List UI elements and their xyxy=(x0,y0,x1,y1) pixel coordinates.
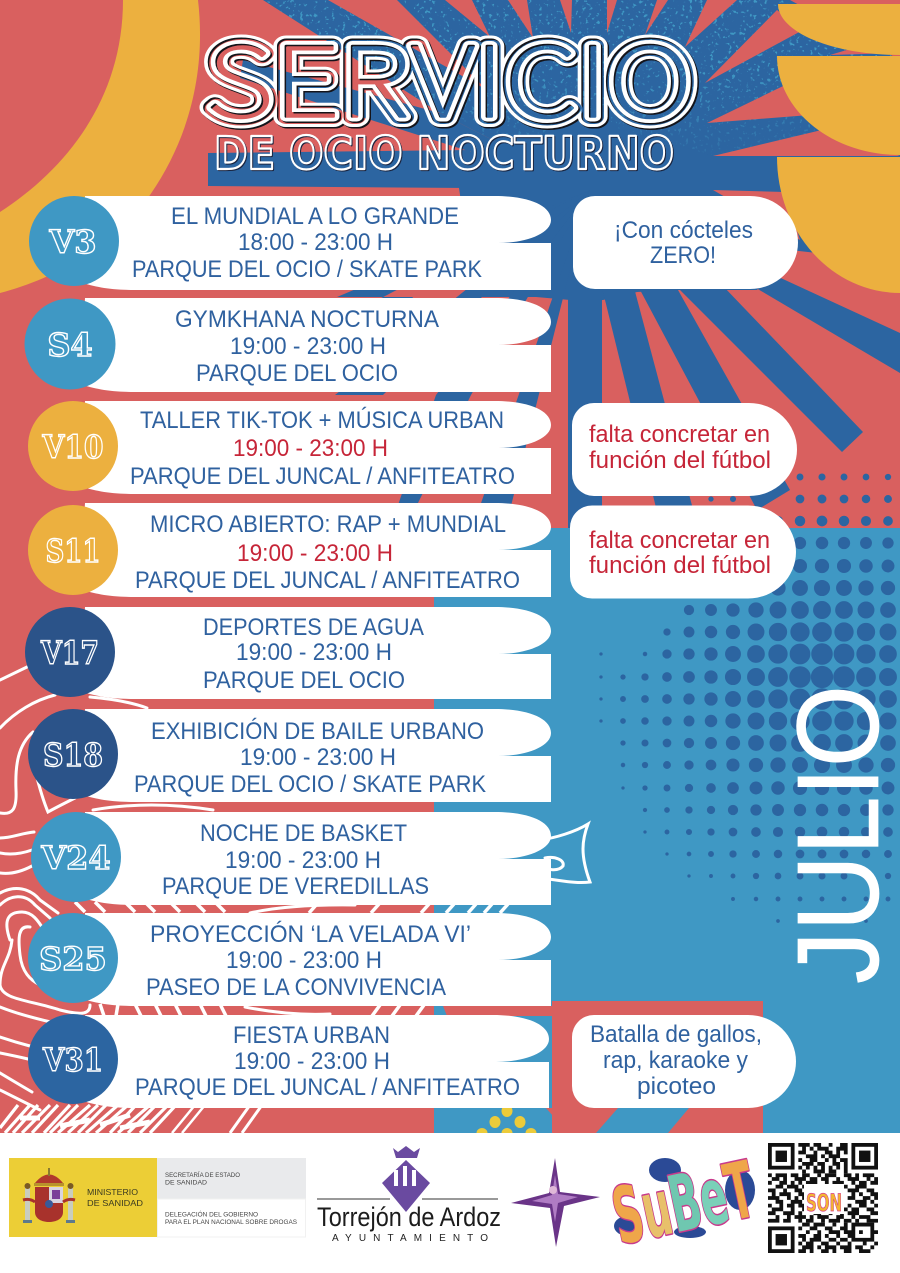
callout: falta concretar S11: falta concretar en xyxy=(589,527,770,554)
row: S11: 19:00 - 23:00 H xyxy=(237,540,393,567)
callout: batalla de gallos xyxy=(572,1015,796,1108)
row: S25 xyxy=(28,913,551,1006)
white scratches xyxy=(0,1105,262,1133)
title xyxy=(200,34,699,130)
row: V10: V10 xyxy=(42,428,104,466)
row: V24: NOCHE DE BASKET xyxy=(200,820,407,847)
row: V24: PARQUE DE VEREDILLAS xyxy=(162,873,429,900)
light blue panels xyxy=(434,528,900,1133)
row: S18: 19:00 - 23:00 H xyxy=(240,744,396,771)
row: S4: PARQUE DEL OCIO xyxy=(196,360,398,387)
halftone dots xyxy=(600,474,896,922)
callout: batalla de gallos: rap, karaoke y xyxy=(603,1047,748,1074)
logo: Ministerio de Sanidad: DE SANIDAD xyxy=(87,1198,143,1208)
row: S11: PARQUE DEL JUNCAL / ANFITEATRO xyxy=(135,567,520,594)
logo: Ministerio de Sanidad: PARA EL PLAN NACIONAL SOBRE DROGAS xyxy=(165,1219,297,1226)
row: V31 xyxy=(28,1014,549,1108)
yellow dots xyxy=(476,1108,536,1133)
callout: batalla de gallos: picoteo xyxy=(637,1073,716,1100)
footer background xyxy=(0,1133,900,1273)
row: V31: FIESTA URBAN xyxy=(233,1022,390,1049)
row: V17: V17 xyxy=(40,634,99,672)
row: V3: V3 xyxy=(48,223,97,261)
row: V17: DEPORTES DE AGUA xyxy=(203,614,424,641)
row: S11 xyxy=(28,503,551,597)
row: S4: S4 xyxy=(47,326,93,364)
row: V10: PARQUE DEL JUNCAL / ANFITEATRO xyxy=(130,463,515,490)
icon: coat of arms xyxy=(23,1168,75,1223)
qr code xyxy=(768,1145,878,1251)
row: S18 xyxy=(28,709,551,802)
row: V3: PARQUE DEL OCIO / SKATE PARK xyxy=(132,256,482,283)
callout: cocteles: ZERO! xyxy=(650,242,716,269)
yellow crescent xyxy=(0,0,200,293)
row: S4: GYMKHANA NOCTURNA xyxy=(175,306,439,333)
logo: Torrejón de Ardoz: AYUNTAMIENTO xyxy=(332,1233,488,1244)
coral lower panel xyxy=(443,1006,552,1115)
row: S18: S18 xyxy=(43,736,103,774)
logo: Subet graffiti: SuBeT xyxy=(605,1145,763,1263)
row: V3: 18:00 - 23:00 H xyxy=(238,229,393,256)
callout: falta concretar V10: falta concretar en xyxy=(589,421,770,448)
logo: purple star xyxy=(511,1158,600,1247)
slanted white dashes xyxy=(75,902,508,1016)
starburst rays with speckle xyxy=(208,0,900,528)
logo: Ministerio de Sanidad: DELEGACIÓN DEL GOBIERNO xyxy=(165,1212,258,1218)
row: V31: PARQUE DEL JUNCAL / ANFITEATRO xyxy=(135,1074,520,1101)
month label: JULIO: JULIO xyxy=(773,685,900,984)
row: V24: 19:00 - 23:00 H xyxy=(225,847,381,874)
qr code: SON xyxy=(806,1189,842,1217)
logo: Torrejón de Ardoz xyxy=(317,1146,501,1244)
row: V10: TALLER TIK-TOK + MÚSICA URBAN xyxy=(140,407,504,434)
logo: Ministerio de Sanidad: MINISTERIO xyxy=(87,1187,138,1197)
row: V3: EL MUNDIAL A LO GRANDE xyxy=(171,203,459,230)
row: S11: MICRO ABIERTO: RAP + MUNDIAL xyxy=(150,511,506,538)
row: S25: 19:00 - 23:00 H xyxy=(226,947,382,974)
row: S25: S25 xyxy=(39,940,107,978)
row: S25: PROYECCIÓN ‘LA VELADA VI’ xyxy=(150,921,471,948)
row: S18: EXHIBICIÓN DE BAILE URBANO xyxy=(151,718,484,745)
logo: Ministerio de Sanidad xyxy=(9,1158,306,1237)
row: V31: 19:00 - 23:00 H xyxy=(234,1048,390,1075)
callout: cocteles: ¡Con cócteles xyxy=(614,217,753,244)
row: S18: PARQUE DEL OCIO / SKATE PARK xyxy=(134,771,486,798)
row: V3 xyxy=(29,196,551,290)
row: S25: PASEO DE LA CONVIVENCIA xyxy=(146,974,446,1001)
row: V17: 19:00 - 23:00 H xyxy=(236,639,392,666)
callout: falta concretar V10: función del fútbol xyxy=(589,447,771,474)
yellow half suns xyxy=(777,4,900,293)
row: S4: 19:00 - 23:00 H xyxy=(230,333,386,360)
row: V10 xyxy=(28,401,551,494)
callout: falta concretar S11 xyxy=(570,506,796,598)
logo: Ministerio de Sanidad: SECRETARÍA DE ESTADO xyxy=(165,1172,240,1179)
row: V24 xyxy=(31,812,551,905)
row: V31: V31 xyxy=(42,1041,103,1079)
callout: falta concretar S11: función del fútbol xyxy=(589,552,771,579)
subtitle: DE OCIO NOCTURNO xyxy=(215,128,675,181)
row: S4 xyxy=(24,298,551,392)
row: V10: 19:00 - 23:00 H xyxy=(233,435,388,462)
icon: municipal crest xyxy=(382,1146,430,1212)
row: S11: S11 xyxy=(46,532,100,570)
logo: Ministerio de Sanidad: DE SANIDAD xyxy=(165,1180,208,1186)
callout: cocteles xyxy=(573,196,798,289)
row: V17: PARQUE DEL OCIO xyxy=(203,667,405,694)
light blue diagonal xyxy=(596,1108,689,1133)
white topographic lines xyxy=(0,667,590,1110)
logo: Torrejón de Ardoz: Torrejón de Ardoz xyxy=(317,1202,501,1232)
callout: batalla de gallos: Batalla de gallos, xyxy=(590,1021,762,1048)
callout: falta concretar V10 xyxy=(572,403,797,496)
subtitle: DE OCIO NOCTURNO xyxy=(214,127,674,180)
row: V24: V24 xyxy=(40,839,111,877)
row: V17 xyxy=(25,607,551,699)
